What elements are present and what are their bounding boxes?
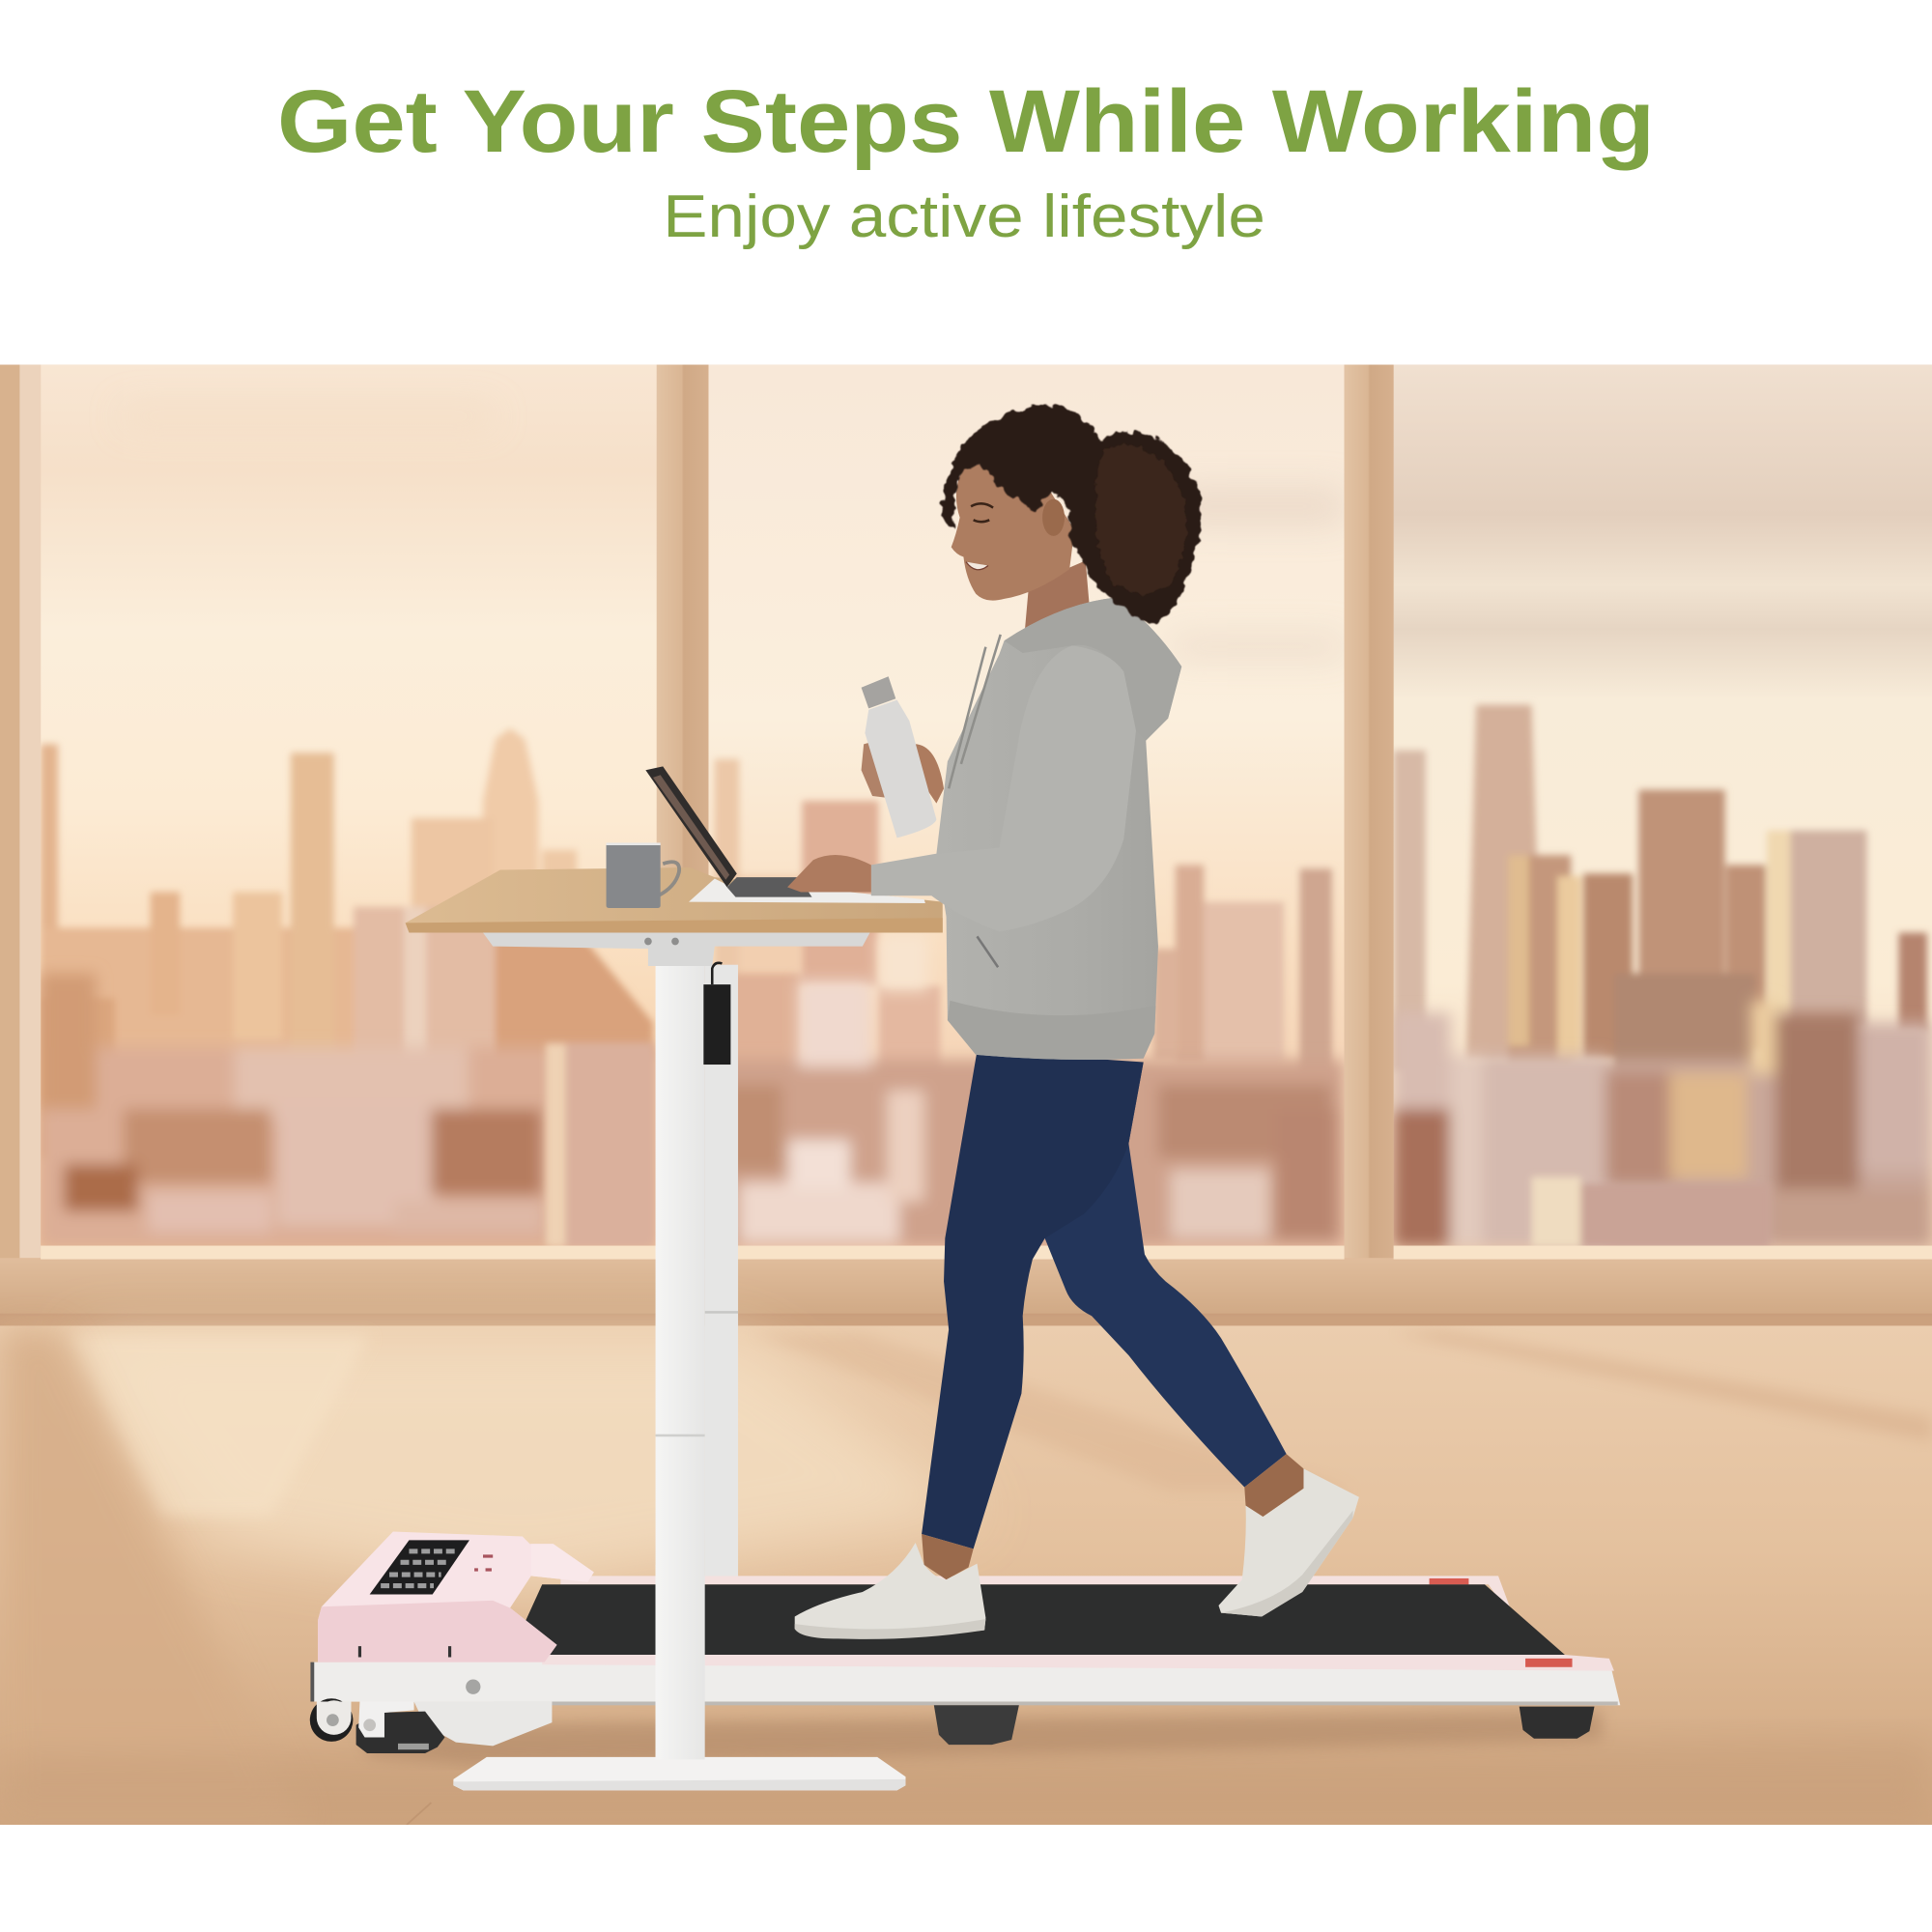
desk column overlap in front of treadmill <box>656 1565 705 1759</box>
hair <box>942 407 1201 623</box>
bolt <box>466 1680 480 1694</box>
subtitle: Enjoy active lifestyle <box>663 183 1265 250</box>
rear rail <box>560 1576 1511 1609</box>
woman walking <box>787 407 1359 1639</box>
front shoe <box>795 1543 985 1637</box>
middle window towers <box>715 759 739 980</box>
sleeve <box>871 645 1136 931</box>
control panel <box>370 1540 493 1595</box>
wooden floor <box>0 1325 1932 1825</box>
wooden desktop <box>406 867 943 933</box>
control box <box>703 984 730 1065</box>
running belt <box>510 1584 1565 1655</box>
water bottle <box>862 676 936 838</box>
left window near city <box>41 1047 657 1247</box>
front leg <box>922 1051 1144 1548</box>
head and face <box>952 464 1074 601</box>
back leg <box>1023 1062 1287 1488</box>
paper under laptop <box>689 878 925 903</box>
motor housing <box>414 1701 552 1746</box>
back shoe <box>1218 1468 1359 1616</box>
title: Get Your Steps While Working <box>277 72 1655 171</box>
support foot right <box>1520 1707 1595 1739</box>
eye and brow <box>971 503 993 522</box>
desk column <box>656 965 705 1759</box>
walking treadmill <box>310 1531 1620 1753</box>
support foot centre <box>934 1705 1019 1745</box>
hand on keyboard <box>787 855 871 892</box>
middle window near city <box>708 1060 1345 1247</box>
laptop <box>645 766 812 897</box>
light building <box>565 1041 651 1244</box>
office background: windows and city skyline <box>0 365 1932 1325</box>
standing desk <box>406 867 943 1790</box>
hoodie body <box>936 598 1181 1060</box>
photo scene <box>0 365 1932 1825</box>
desk foot <box>453 1757 906 1790</box>
ankles <box>922 1534 974 1579</box>
desk rear column <box>705 965 738 1577</box>
coffee mug <box>607 842 679 908</box>
hands holding bottle <box>862 739 892 799</box>
transport wheel <box>310 1698 353 1742</box>
rear stand <box>356 1712 444 1753</box>
pink console <box>318 1531 594 1662</box>
floor shadow <box>357 1710 1602 1765</box>
ear <box>1042 499 1065 536</box>
window frames <box>0 365 19 366</box>
desk bracket <box>483 933 870 966</box>
city skyline <box>41 407 1932 1248</box>
ponytail curls <box>1094 445 1186 593</box>
sweater hem <box>948 1001 1155 1060</box>
neck <box>1024 560 1090 640</box>
front frame <box>313 1660 1620 1705</box>
right window towers <box>1394 751 1426 1070</box>
right window near city <box>1394 1060 1932 1247</box>
hood <box>1005 598 1181 741</box>
left window towers <box>41 740 62 931</box>
low block <box>1531 1184 1770 1247</box>
smile <box>966 562 988 570</box>
